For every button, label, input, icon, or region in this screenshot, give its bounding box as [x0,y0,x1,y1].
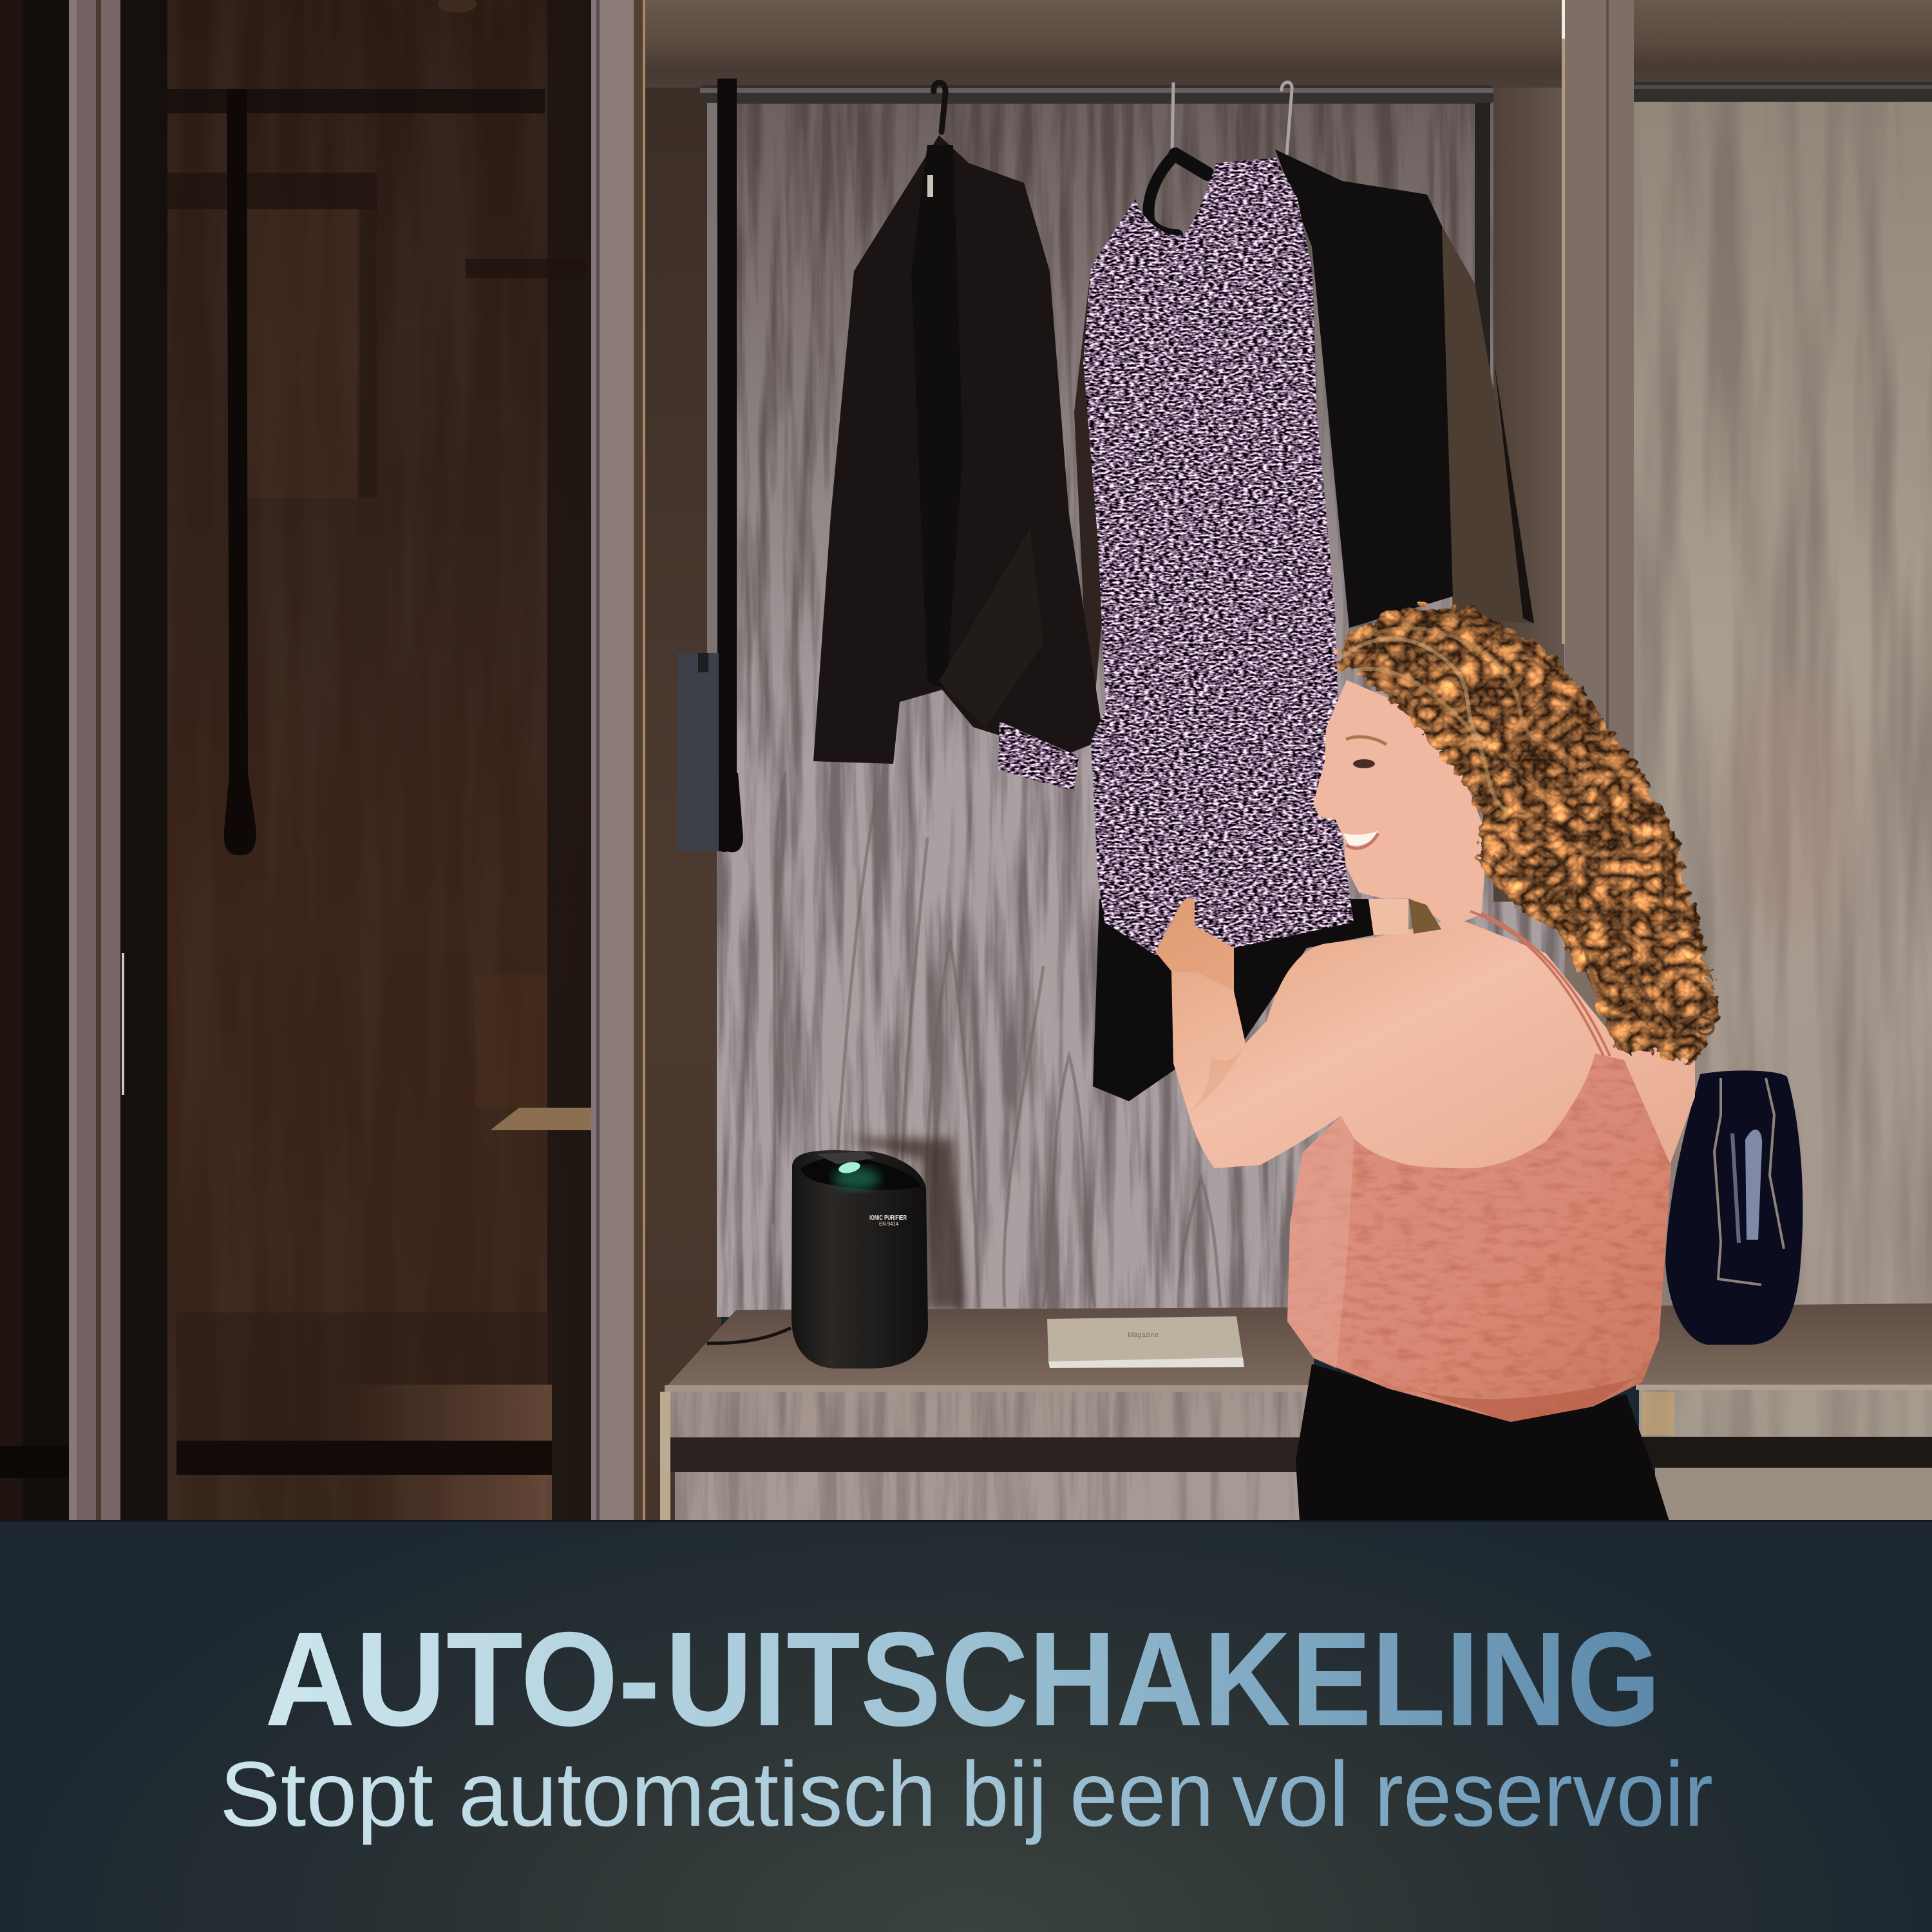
skin of back and raised arm [1155,898,1695,1179]
facial features [1343,737,1387,848]
dehumidifier [707,1150,928,1368]
shelf with drawers [660,1303,1932,1521]
subheading: automatisch [459,1743,936,1846]
hangers [934,82,1292,235]
black blazer [813,135,1104,764]
subheading: een [1070,1743,1214,1846]
coral satin top [1287,1054,1671,1422]
wardrobe ceiling [645,0,1566,88]
woman [1155,604,1716,1521]
clothing rail [700,82,1932,612]
stray curl [1674,1017,1714,1034]
inner side wall [634,0,721,1521]
black trousers [1296,1364,1669,1521]
tweed dress [1083,158,1354,955]
right post and shadowed side wall [1493,0,1634,1127]
pull-down wardrobe lift mechanism [677,79,743,852]
dehumidifier shadow on wall [844,1139,966,1310]
heading: UITSCHAKELING [665,1605,1661,1754]
device brand text: EN 9414 [879,1221,899,1227]
hair behind neck [1408,899,1441,934]
dark back side of dress [1074,267,1106,741]
top straps [1470,911,1610,1056]
curly hair [1332,604,1716,1060]
top opening [800,1157,921,1190]
hair curls [1343,628,1668,1024]
scarf fringe under blazer [998,721,1079,791]
power cable [707,1328,791,1343]
subheading: bij [961,1743,1047,1846]
face and neck [1313,680,1488,927]
right wood panel [1633,0,1932,1314]
left glass wardrobe panel [0,0,596,1521]
device brand text: IONIC PURIFIER [869,1215,907,1222]
black jacket behind dress [1275,149,1534,628]
wardrobe post [591,0,634,1521]
booklet [1047,1316,1244,1368]
wood grain arches [773,773,1220,1307]
forearm crease shadow [1188,1043,1245,1113]
subheading: vol [1232,1743,1349,1846]
green indicator light [833,1160,880,1190]
hand shading [1155,898,1234,991]
heading: AUTO- [265,1605,660,1754]
wood back panel [717,97,1570,1317]
neck shadow patch [1368,899,1408,935]
booklet: Magazine [1128,1331,1159,1339]
bottom banner [0,1520,1932,1932]
device brand text [869,1215,907,1227]
vase with face relief [1665,1070,1803,1345]
reflected pull-down handle [224,89,256,855]
subheading: Stopt [220,1743,433,1846]
device body [791,1150,928,1368]
subheading: reservoir [1374,1743,1713,1846]
black trousers on hanger [1093,899,1374,1101]
